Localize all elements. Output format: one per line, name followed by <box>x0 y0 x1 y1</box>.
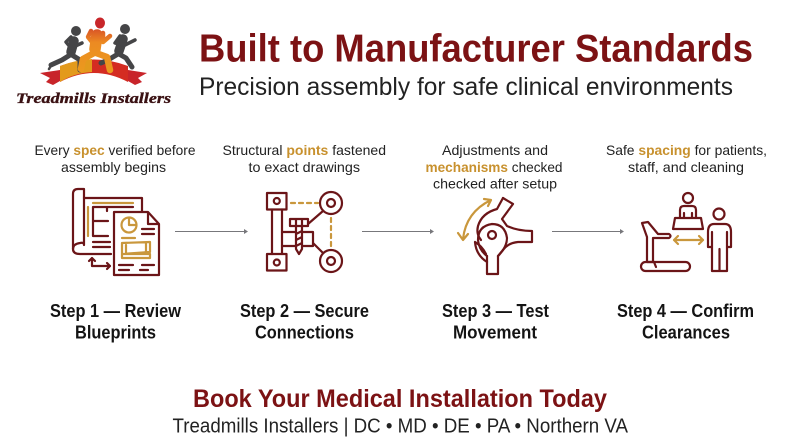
arrow 1 <box>175 229 248 234</box>
icon: ribbon banner <box>40 59 147 85</box>
step 4 label: Step 4 — Confirm <box>617 301 754 321</box>
arrow 3 <box>552 229 624 234</box>
panel: step 2 <box>222 142 386 342</box>
logo wordmark: Treadmills Installers <box>16 91 171 107</box>
step 1 label: Blueprints <box>75 322 156 342</box>
step 2 label: Step 2 — Secure <box>240 301 369 321</box>
icon: right runner <box>101 24 135 67</box>
step 1 caption <box>34 142 196 175</box>
icon: left runner <box>49 26 82 70</box>
icon: moving joint <box>458 198 532 274</box>
step 3 caption <box>426 142 562 192</box>
panel: step 3 <box>426 142 562 342</box>
panel: step 4 <box>606 142 767 342</box>
step 1 caption: assembly begins <box>61 159 166 175</box>
icon: blueprints and document <box>73 189 159 275</box>
step 2 caption: to exact drawings <box>248 159 360 175</box>
step 3 caption: mechanisms checked <box>426 159 562 175</box>
call to action heading: Book Your Medical Installation Today <box>193 385 607 413</box>
icon: centre runner <box>81 18 110 70</box>
icon: treadmill with clearance <box>641 193 731 271</box>
step 3 label <box>442 301 549 342</box>
step 1 label: Step 1 — Review <box>50 301 182 321</box>
service area line: Treadmills Installers | DC • MD • DE • PA • Northern VA <box>172 416 629 438</box>
step 2 caption <box>222 142 386 175</box>
step 4 caption: Safe spacing for patients, <box>606 142 767 158</box>
step 4 label: Clearances <box>642 322 730 342</box>
step 2 caption: Structural points fastened <box>222 142 386 158</box>
step 2 label <box>240 301 369 342</box>
step 4 caption: staff, and cleaning <box>628 159 744 175</box>
step 4 caption <box>606 142 767 175</box>
step 3 label: Movement <box>453 322 537 342</box>
arrow 2 <box>362 229 434 234</box>
step 3 caption: checked after setup <box>433 176 557 192</box>
title: Built to Manufacturer Standards <box>199 28 753 70</box>
icon: fastened bracket <box>267 192 342 272</box>
step 3 caption: Adjustments and <box>442 142 548 158</box>
logo <box>16 18 171 107</box>
step 1 label <box>50 301 182 342</box>
subtitle: Precision assembly for safe clinical environments <box>199 73 733 101</box>
step 3 label: Step 3 — Test <box>442 301 549 321</box>
step 2 label: Connections <box>255 322 354 342</box>
step 1 caption: Every spec verified before <box>34 142 196 158</box>
panel: step 1 <box>34 142 196 342</box>
step 4 label <box>617 301 754 342</box>
